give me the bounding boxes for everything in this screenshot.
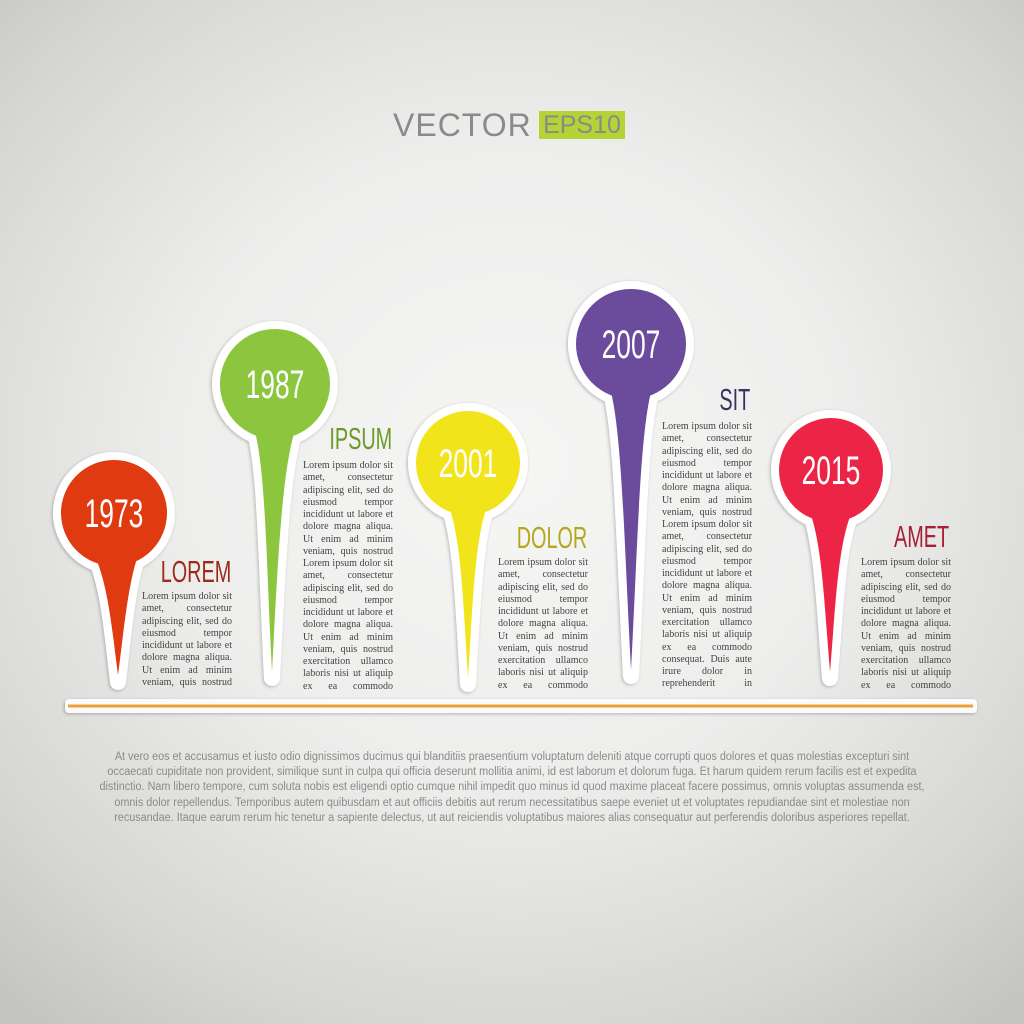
year 1973: 1973: [85, 492, 143, 536]
text: ipsum: Ut enim ad minim: [303, 632, 393, 642]
text: amet: Ut enim ad minim: [861, 630, 951, 642]
text: lorem: veniam, quis nostrud: [142, 677, 232, 688]
year 2007: 2007: [602, 323, 660, 367]
text: amet: adipiscing elit, sed do: [861, 582, 951, 592]
text: ipsum: Lorem ipsum dolor sit: [303, 558, 393, 569]
text: sit: veniam, quis nostrud: [662, 605, 752, 616]
pin 1973: [53, 452, 175, 682]
paragraph: recusandae. Itaque earum rerum hic tenetur a sapiente delectus, ut aut reiciendis voluptatibus maiores alias consequatur aut perferendis doloribus asperiores repellat.: [114, 812, 910, 824]
text: dolor: laboris nisi ut aliquip: [498, 667, 588, 678]
text: ipsum: amet, consectetur: [303, 472, 393, 483]
text: sit: eiusmod tempor: [662, 458, 752, 469]
text: ipsum: [303, 460, 393, 692]
pin 2001: [408, 403, 528, 684]
pin 2007: [568, 281, 694, 676]
text: dolor: eiusmod tempor: [498, 594, 588, 605]
text: lorem: Ut enim ad minim: [142, 664, 232, 676]
heading IPSUM: IPSUM: [329, 421, 392, 456]
text: ipsum: veniam, quis nostrud: [303, 644, 393, 655]
text: amet: exercitation ullamco: [861, 655, 951, 666]
text: dolor: dolore magna aliqua.: [498, 618, 588, 629]
heading SIT: SIT: [719, 382, 750, 417]
text: sit: eiusmod tempor: [662, 556, 752, 567]
text: sit: [662, 421, 752, 689]
text: ipsum: laboris nisi ut aliquip: [303, 668, 393, 679]
text: amet: ex ea commodo: [861, 680, 951, 690]
text: sit: laboris nisi ut aliquip: [662, 629, 752, 640]
pin 1987: [212, 321, 338, 678]
text: ipsum: eiusmod tempor: [303, 595, 393, 606]
text: ipsum: Ut enim ad minim: [303, 534, 393, 544]
paragraph: occaecati cupiditate non provident, similique sunt in culpa qui officia deserunt mollitia animi, id est laborum et dolorum fuga. Et harum quidem rerum facilis est et expedita: [107, 766, 917, 778]
heading DOLOR: DOLOR: [516, 520, 587, 555]
paragraph: distinctio. Nam libero tempore, cum soluta nobis est eligendi optio cumque nihil impedit quo minus id quod maxime placeat facere possimus, omnis voluptas assumenda est,: [100, 781, 924, 793]
text: dolor: adipiscing elit, sed do: [498, 582, 588, 592]
text: dolor: [498, 557, 588, 690]
text: sit: Ut enim ad minim: [662, 494, 752, 506]
text: sit: Ut enim ad minim: [662, 592, 752, 604]
text: sit: Lorem ipsum dolor sit: [662, 421, 752, 432]
text: ipsum: adipiscing elit, sed do: [303, 582, 393, 594]
text: sit: incididunt ut labore et: [662, 470, 752, 481]
baseline: [65, 699, 977, 713]
text: lorem: dolore magna aliqua.: [142, 652, 232, 663]
badge: EPS10: EPS10: [543, 111, 621, 139]
title: VECTOR: [393, 107, 532, 143]
text: sit: dolore magna aliqua.: [662, 580, 752, 591]
text: amet: veniam, quis nostrud: [861, 643, 951, 654]
text: ipsum: dolore magna aliqua.: [303, 521, 393, 532]
text: lorem: Lorem ipsum dolor sit: [142, 591, 232, 602]
text: amet: amet, consectetur: [861, 569, 951, 580]
text: dolor: incididunt ut labore et: [498, 606, 588, 617]
text: ipsum: veniam, quis nostrud: [303, 546, 393, 557]
year 2001: 2001: [439, 442, 497, 486]
text: ipsum: exercitation ullamco: [303, 656, 393, 667]
text: ipsum: incididunt ut labore et: [303, 509, 393, 520]
heading LOREM: LOREM: [160, 554, 231, 589]
paragraph: [100, 751, 924, 824]
text: sit: Lorem ipsum dolor sit: [662, 519, 752, 530]
paragraph: omnis dolor repellendus. Temporibus autem quibusdam et aut officiis debitis aut rerum necessitatibus saepe eveniet ut et voluptates repudiandae sint et molestiae non: [114, 797, 910, 809]
text: amet: incididunt ut labore et: [861, 606, 951, 617]
text: lorem: [142, 591, 232, 688]
text: sit: exercitation ullamco: [662, 617, 752, 628]
text: amet: Lorem ipsum dolor sit: [861, 557, 951, 568]
text: sit: consequat. Duis aute: [662, 654, 752, 665]
text: dolor: veniam, quis nostrud: [498, 643, 588, 654]
text: sit: adipiscing elit, sed do: [662, 446, 752, 456]
year 1987: 1987: [246, 363, 304, 407]
text: lorem: eiusmod tempor: [142, 628, 232, 639]
text: lorem: adipiscing elit, sed do: [142, 616, 232, 626]
text: dolor: exercitation ullamco: [498, 655, 588, 666]
year 2015: 2015: [802, 449, 860, 493]
text: ipsum: incididunt ut labore et: [303, 607, 393, 618]
text: lorem: amet, consectetur: [142, 603, 232, 614]
text: ipsum: dolore magna aliqua.: [303, 619, 393, 630]
title: [393, 107, 625, 143]
text: sit: amet, consectetur: [662, 531, 752, 542]
text: ipsum: Lorem ipsum dolor sit: [303, 460, 393, 471]
heading AMET: AMET: [894, 519, 949, 554]
text: ipsum: amet, consectetur: [303, 570, 393, 581]
text: sit: amet, consectetur: [662, 433, 752, 444]
text: amet: laboris nisi ut aliquip: [861, 667, 951, 678]
paragraph: At vero eos et accusamus et iusto odio dignissimos ducimus qui blanditiis praesentium voluptatum deleniti atque corrupti quos dolores et quas molestias excepturi sint: [115, 751, 909, 763]
text: dolor: Ut enim ad minim: [498, 630, 588, 642]
text: ipsum: adipiscing elit, sed do: [303, 484, 393, 496]
text: dolor: amet, consectetur: [498, 569, 588, 580]
text: ipsum: ex ea commodo: [303, 680, 393, 692]
text: amet: eiusmod tempor: [861, 594, 951, 605]
text: amet: dolore magna aliqua.: [861, 618, 951, 629]
text: lorem: incididunt ut labore et: [142, 640, 232, 651]
text: dolor: Lorem ipsum dolor sit: [498, 557, 588, 568]
text: sit: dolore magna aliqua.: [662, 482, 752, 493]
text: sit: incididunt ut labore et: [662, 568, 752, 579]
text: dolor: ex ea commodo: [498, 680, 588, 690]
text: sit: adipiscing elit, sed do: [662, 544, 752, 554]
pin 2015: [771, 410, 891, 678]
text: amet: [861, 557, 951, 690]
text: sit: veniam, quis nostrud: [662, 507, 752, 518]
text: sit: ex ea commodo: [662, 642, 752, 652]
text: sit: irure dolor in: [662, 666, 752, 677]
text: ipsum: eiusmod tempor: [303, 497, 393, 508]
text: sit: reprehenderit in: [662, 678, 752, 689]
